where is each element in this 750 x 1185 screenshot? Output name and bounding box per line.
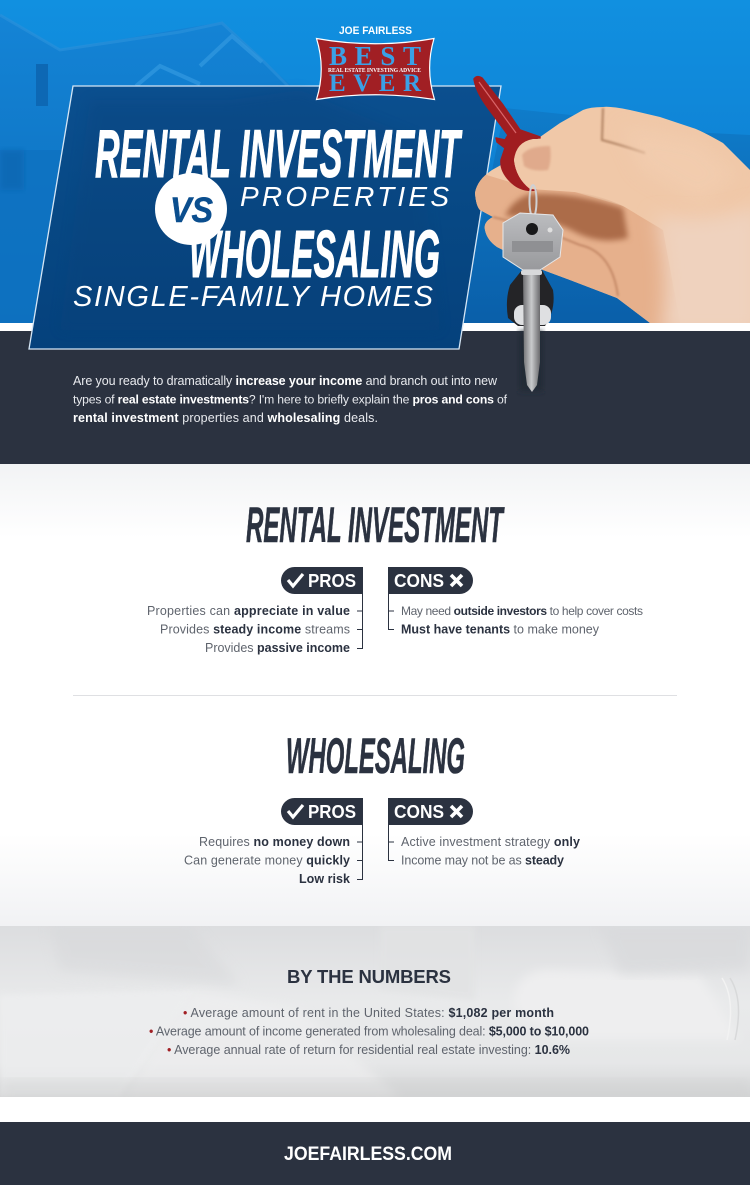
headline: properties: PROPERTIES [240, 181, 449, 212]
intro text: types of real estate investments? I'm here to briefly explain the pros and cons of [73, 392, 508, 406]
cons connector [388, 594, 394, 630]
section: wholesaling [184, 728, 580, 886]
thumb overhang [514, 139, 560, 189]
logo badge [316, 38, 434, 100]
dark intro band [0, 331, 750, 464]
silver key [503, 213, 563, 392]
pros list: Low risk [299, 872, 350, 886]
numbers list: • Average amount of income generated from wholesaling deal: $5,000 to $10,000 [149, 1024, 589, 1038]
thumb and back of hand [514, 138, 750, 323]
panel: by the numbers [0, 926, 750, 1110]
intro text: rental investment properties and wholesaling deals. [73, 411, 378, 425]
pros badge [281, 798, 363, 825]
cons badge: CONS [394, 570, 444, 591]
intro text: Are you ready to dramatically increase your income and branch out into new [73, 374, 498, 388]
cons badge [388, 567, 473, 594]
logo name: JOE FAIRLESS [339, 25, 412, 37]
cons badge: CONS [394, 801, 444, 822]
cons badge [388, 798, 473, 825]
pros badge: PROS [308, 801, 356, 822]
logo badge: EVER [329, 70, 422, 97]
cons list: Must have tenants to make money [401, 622, 600, 636]
thumb nail [522, 146, 551, 170]
pros list: Properties can appreciate in value [147, 604, 350, 618]
pros list: Provides passive income [205, 641, 350, 655]
shadow under thumb [505, 194, 628, 240]
content background [0, 464, 750, 926]
pros list [184, 835, 350, 886]
cons list [401, 604, 643, 636]
headline: single-family homes: SINGLE-FAMILY HOMES [73, 281, 434, 313]
logo [316, 25, 434, 100]
index crease [602, 108, 645, 153]
pros badge [281, 567, 363, 594]
headline [73, 116, 463, 313]
wrist [655, 205, 750, 335]
hand holding keys [470, 77, 750, 392]
pros list: Provides steady income streams [160, 622, 350, 636]
fingers and palm [475, 174, 670, 323]
vs badge: VS [170, 191, 213, 230]
pros list [147, 604, 350, 655]
cons list: Income may not be as steady [401, 854, 564, 868]
distant hill [460, 108, 750, 323]
headline: WHOLESALING [189, 217, 440, 292]
pros badge: PROS [308, 570, 356, 591]
hand base [470, 100, 750, 325]
red key [474, 77, 540, 190]
cons connector [388, 825, 394, 860]
footer [0, 1122, 750, 1185]
finger crease [493, 217, 618, 296]
cons list: Active investment strategy only [401, 835, 580, 849]
key ring [530, 185, 536, 217]
pros list: Can generate money quickly [184, 854, 350, 868]
back of hand highlight [622, 145, 647, 155]
house silhouette [0, 15, 290, 323]
title panel [29, 86, 501, 349]
numbers heading: BY THE NUMBERS [287, 966, 451, 987]
pros connector [357, 594, 362, 648]
numbers list: • Average annual rate of return for residential real estate investing: 10.6% [167, 1043, 570, 1057]
section: rental investment [147, 497, 643, 655]
header background [0, 0, 750, 323]
logo badge: BEST [329, 41, 421, 71]
cons list: May need outside investors to help cover costs [401, 604, 643, 618]
intro text [73, 374, 508, 425]
vs badge [155, 173, 227, 245]
numbers background photo [0, 926, 750, 1110]
pros connector [357, 825, 362, 880]
pros list: Requires no money down [199, 835, 350, 849]
back key [507, 270, 554, 326]
white strip [0, 323, 750, 331]
logo badge: REAL ESTATE INVESTING ADVICE [328, 67, 421, 74]
numbers list: • Average amount of rent in the United States: $1,082 per month [183, 1006, 554, 1020]
numbers list [149, 1006, 589, 1057]
key shadow on band [519, 331, 543, 391]
footer url: JOEFAIRLESS.COM [284, 1144, 452, 1165]
section: wholesaling: WHOLESALING [286, 728, 465, 784]
cons list [401, 835, 580, 868]
